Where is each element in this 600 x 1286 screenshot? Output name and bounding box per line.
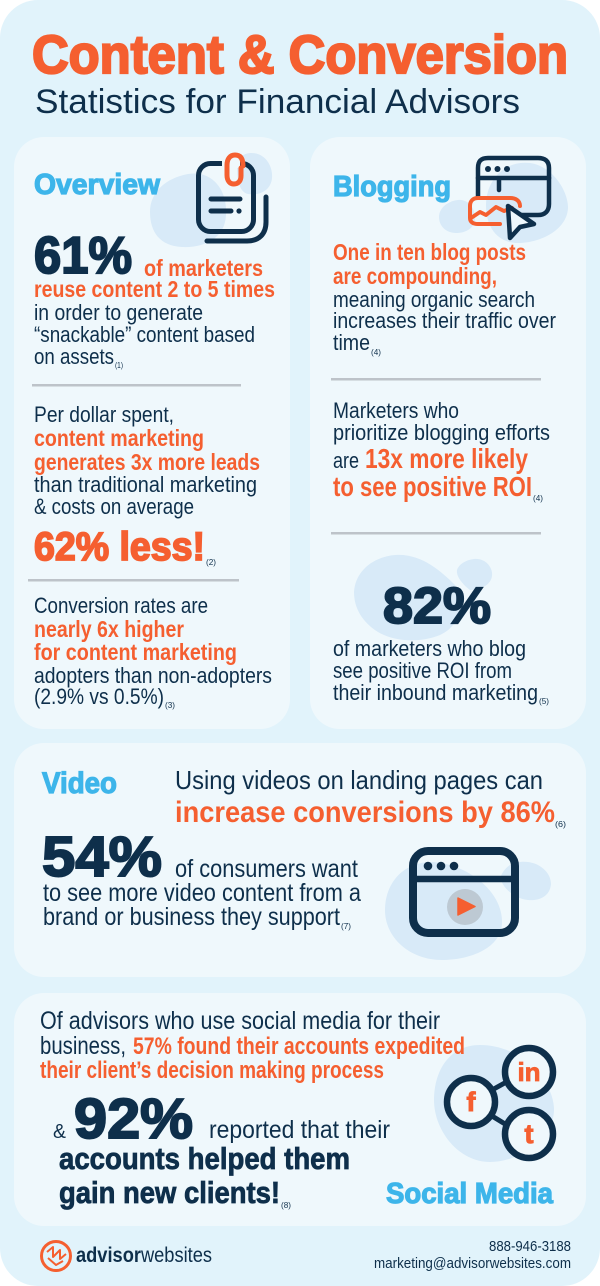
stat: compounding posts: increases their traffic over [333,308,556,333]
stat: 13x more likely: are [333,448,359,473]
panel: video [14,743,586,977]
stat: 54% of consumers: (7) [341,922,351,931]
stat: 57% expedited decisions: their client’s decision making process [40,1057,384,1084]
panel: social media [14,993,586,1226]
stat: 82% positive ROI: 82% [383,577,491,634]
stat: conversion rates [34,593,272,710]
stat: landing page conversions: increase conversions by 86% [175,796,555,829]
icon: social network circles [434,1045,554,1162]
stat: 61% of marketers: reuse content 2 to 5 times [34,276,275,302]
stat: conversion rates: adopters than non-adopters [34,663,272,688]
stat: 57% expedited decisions: Of advisors who use social media for their [40,1007,440,1035]
stat: conversion rates: for content marketing [34,639,237,665]
stat: 82% positive ROI: of marketers who blog [333,636,526,661]
stat: 61% of marketers: of marketers [144,255,263,281]
footer logo: advisorwebsites: advisorwebsites [76,1244,212,1267]
stat: 13x more likely [333,398,550,503]
stat: 92% new clients: gain new clients! [59,1175,280,1210]
stat: conversion rates: (2.9% vs 0.5%) [34,684,164,709]
stat: content marketing leads: & costs on average [34,494,194,519]
stat: 13x more likely: to see positive ROI [333,471,532,502]
stat: 92% new clients: & [53,1121,67,1143]
icon: social network circles: in [517,1057,541,1087]
stat: 61% of marketers: 61% [34,227,132,285]
title: Statistics for Financial Advisors [35,83,520,121]
stat: 13x more likely: prioritize blogging efforts [333,420,550,445]
stat: 92% new clients: accounts helped them [59,1141,350,1176]
heading: blogging: Blogging [333,171,451,203]
stat: content marketing leads [34,402,260,569]
stat: 54% of consumers: 54% [42,825,162,889]
stat: content marketing leads: Per dollar spent, [34,402,174,427]
stat: content marketing leads: than traditional marketing [34,472,257,497]
stat: compounding posts: are compounding, [333,263,497,289]
icon: video player window [385,851,551,960]
stat: 61% of marketers: on assets [34,344,114,369]
heading: overview: Overview [34,169,160,201]
stat: conversion rates: (3) [165,701,175,710]
footer logo: advisorwebsites [42,1242,212,1270]
stat: 92% new clients [53,1087,390,1210]
panel: overview [14,137,290,729]
heading: social media: Social Media [386,1178,554,1210]
title [32,25,568,121]
heading: video: Video [42,767,117,800]
stat: 54% of consumers: brand or business they support [43,903,340,931]
footer contact details [374,1238,571,1272]
stat: compounding posts: time [333,330,370,355]
stat: 13x more likely: (4) [533,494,543,503]
stat: 61% of marketers: in order to generate [34,300,203,325]
title: Content & Conversion [32,25,568,85]
footer contact details: 888-946-3188 [489,1238,571,1255]
stat: compounding posts: (4) [371,348,381,357]
stat: 54% of consumers [42,825,361,931]
stat: landing page conversions: Using videos on landing pages can [175,765,543,795]
stat: 13x more likely: Marketers who [333,398,459,423]
stat: 54% of consumers: of consumers want [175,855,358,883]
stat: content marketing leads: (2) [206,558,216,567]
stat: compounding posts: One in ten blog posts [333,239,526,265]
icon: social network circles: f [466,1087,476,1117]
stat: content marketing leads: generates 3x more leads [34,449,260,475]
stat: landing page conversions [175,765,566,829]
panel: blogging [310,137,586,729]
stat: 82% positive ROI: their inbound marketing [333,680,538,705]
stat: content marketing leads: 62% less! [34,525,205,569]
stat: 61% of marketers [34,227,275,370]
stat: landing page conversions: (6) [555,820,566,829]
stat: 92% new clients: (8) [281,1201,291,1210]
stat: 92% new clients: 92% [74,1087,193,1151]
stat: 57% expedited decisions: 57% found their accounts expedited [133,1033,465,1060]
stat: 82% positive ROI [333,555,549,706]
stat: 57% expedited decisions: business, [40,1032,126,1060]
stat: conversion rates: Conversion rates are [34,593,208,618]
stat: 57% expedited decisions [40,1007,465,1084]
icon: browser window with chart and cursor [439,158,568,243]
stat: 82% positive ROI: (5) [539,697,549,706]
stat: 61% of marketers: “snackable” content based [34,322,255,347]
icon: social network circles: t [524,1119,534,1149]
stat: 82% positive ROI: see positive ROI from [333,658,512,683]
icon: document with paperclip [150,153,272,247]
stat: 13x more likely: 13x more likely [365,443,528,474]
stat: 61% of marketers: (1) [115,361,123,370]
footer contact details: marketing@advisorwebsites.com [374,1255,571,1272]
stat: 54% of consumers: to see more video content from a [43,879,361,907]
stat: compounding posts [333,239,556,357]
stat: compounding posts: meaning organic search [333,287,535,312]
stat: 92% new clients: reported that their [209,1116,390,1144]
stat: content marketing leads: content marketing [34,425,204,451]
stat: conversion rates: nearly 6x higher [34,616,184,642]
